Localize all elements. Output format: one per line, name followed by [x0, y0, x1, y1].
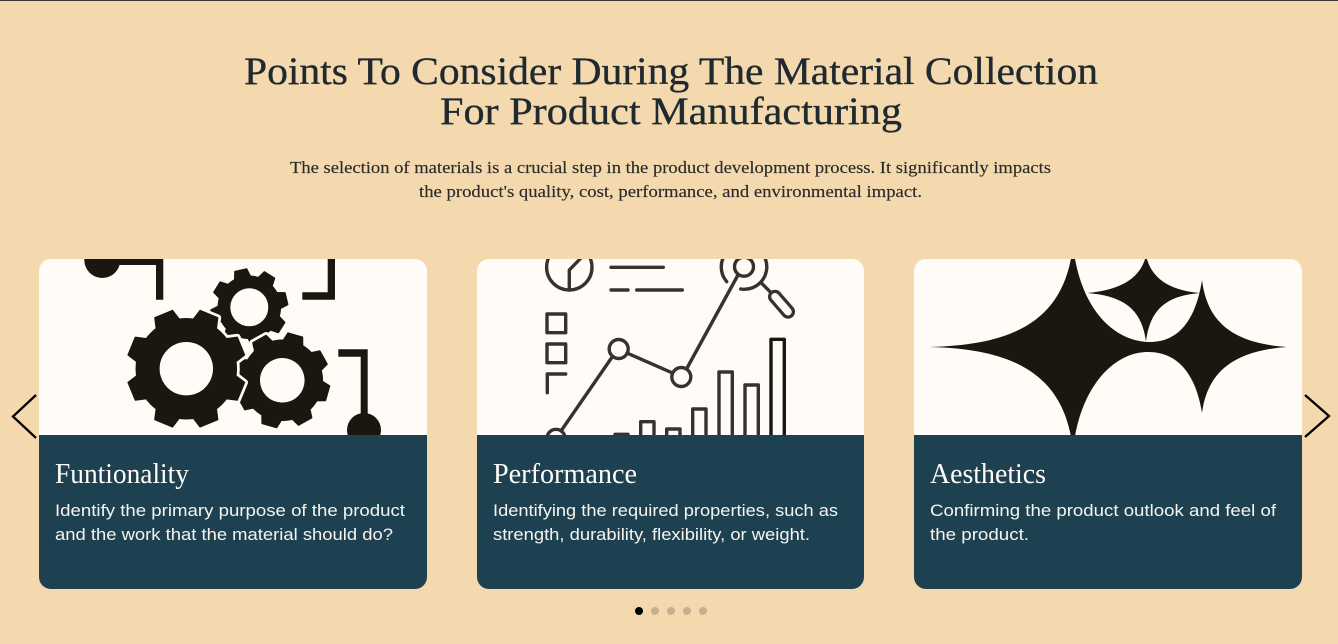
- card body: aesthetics: [914, 435, 1302, 589]
- card image: sparkle stars: [914, 259, 1302, 435]
- arrow: previous: [13, 395, 36, 438]
- panel: functionality card: [39, 242, 427, 589]
- panel: aesthetics card: [914, 245, 1302, 589]
- card image: line and bar chart: [477, 259, 864, 435]
- arrow: next: [1305, 395, 1329, 437]
- card text: aesthetics: Confirming the product outlook and feel of: [930, 502, 1276, 520]
- intro text: The selection of materials is a crucial step in the product development process. It significantly impacts: [290, 158, 1051, 177]
- title: [244, 49, 1098, 133]
- carousel pagination dots: [635, 607, 707, 615]
- title: For Product Manufacturing: [440, 89, 902, 133]
- card heading: functionality: Funtionality: [55, 459, 189, 490]
- panel: performance card: [477, 245, 864, 589]
- card text: performance: [493, 502, 838, 544]
- card text: aesthetics: [930, 502, 1276, 544]
- card text: performance: strength, durability, flexibility, or weight.: [493, 526, 810, 544]
- card text: functionality: [55, 502, 405, 544]
- card text: functionality: Identify the primary purpose of the product: [55, 502, 405, 520]
- card text: aesthetics: the product.: [930, 526, 1029, 544]
- card heading: aesthetics: Aesthetics: [930, 459, 1046, 490]
- card body: performance: [477, 435, 864, 589]
- intro text: [290, 158, 1051, 201]
- title: Points To Consider During The Material Collection: [244, 49, 1098, 93]
- card text: performance: Identifying the required properties, such as: [493, 502, 838, 520]
- card heading: performance: Performance: [493, 459, 637, 490]
- card image: gears: [39, 259, 427, 435]
- card body: functionality: [39, 435, 427, 589]
- intro text: the product's quality, cost, performance, and environmental impact.: [419, 182, 922, 201]
- card text: functionality: and the work that the material should do?: [55, 526, 393, 544]
